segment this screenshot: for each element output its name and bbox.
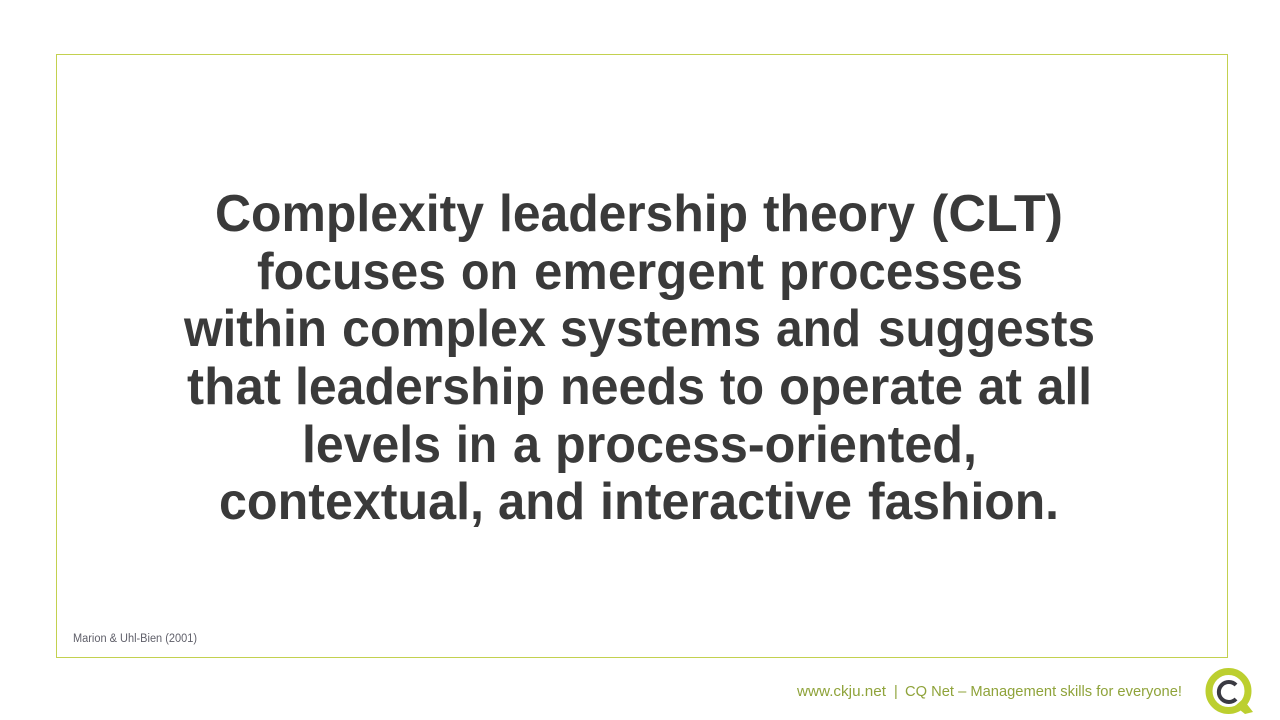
- title statement: complex: [342, 300, 546, 358]
- source citation: Marion & Uhl-Bien (2001): [73, 633, 197, 645]
- title statement: needs: [560, 358, 705, 416]
- title statement: and: [498, 473, 585, 531]
- title statement: to: [720, 358, 764, 416]
- title statement: [183, 185, 1095, 531]
- title statement: a: [513, 416, 541, 474]
- title statement: suggests: [878, 300, 1095, 358]
- panel: frame: [56, 54, 1228, 658]
- title statement: in: [456, 416, 497, 474]
- title statement: and: [776, 300, 861, 358]
- title statement: leadership: [499, 185, 748, 243]
- title statement: within: [183, 300, 327, 358]
- title statement: on: [461, 243, 518, 301]
- icon: CQ logo: [1209, 672, 1253, 714]
- footer text: CQ Net – Management skills for everyone!: [905, 684, 1182, 700]
- title statement: levels: [302, 416, 441, 474]
- title statement: operate: [779, 358, 963, 416]
- title statement: interactive: [600, 473, 852, 531]
- title statement: contextual,: [219, 473, 484, 531]
- title statement: all: [1037, 358, 1092, 416]
- title statement: fashion.: [868, 473, 1059, 531]
- title statement: systems: [560, 300, 761, 358]
- footer text: |: [894, 684, 898, 700]
- title statement: processes: [779, 243, 1023, 301]
- title statement: (CLT): [931, 185, 1063, 243]
- title statement: at: [978, 358, 1022, 416]
- title statement: process-oriented,: [555, 416, 977, 474]
- title statement: emergent: [534, 243, 764, 301]
- footer text: www.ckju.net: [796, 684, 886, 700]
- title statement: Complexity: [215, 185, 484, 243]
- title statement: theory: [763, 185, 915, 243]
- title statement: that: [187, 358, 281, 416]
- title statement: focuses: [257, 243, 446, 301]
- title statement: leadership: [295, 358, 545, 416]
